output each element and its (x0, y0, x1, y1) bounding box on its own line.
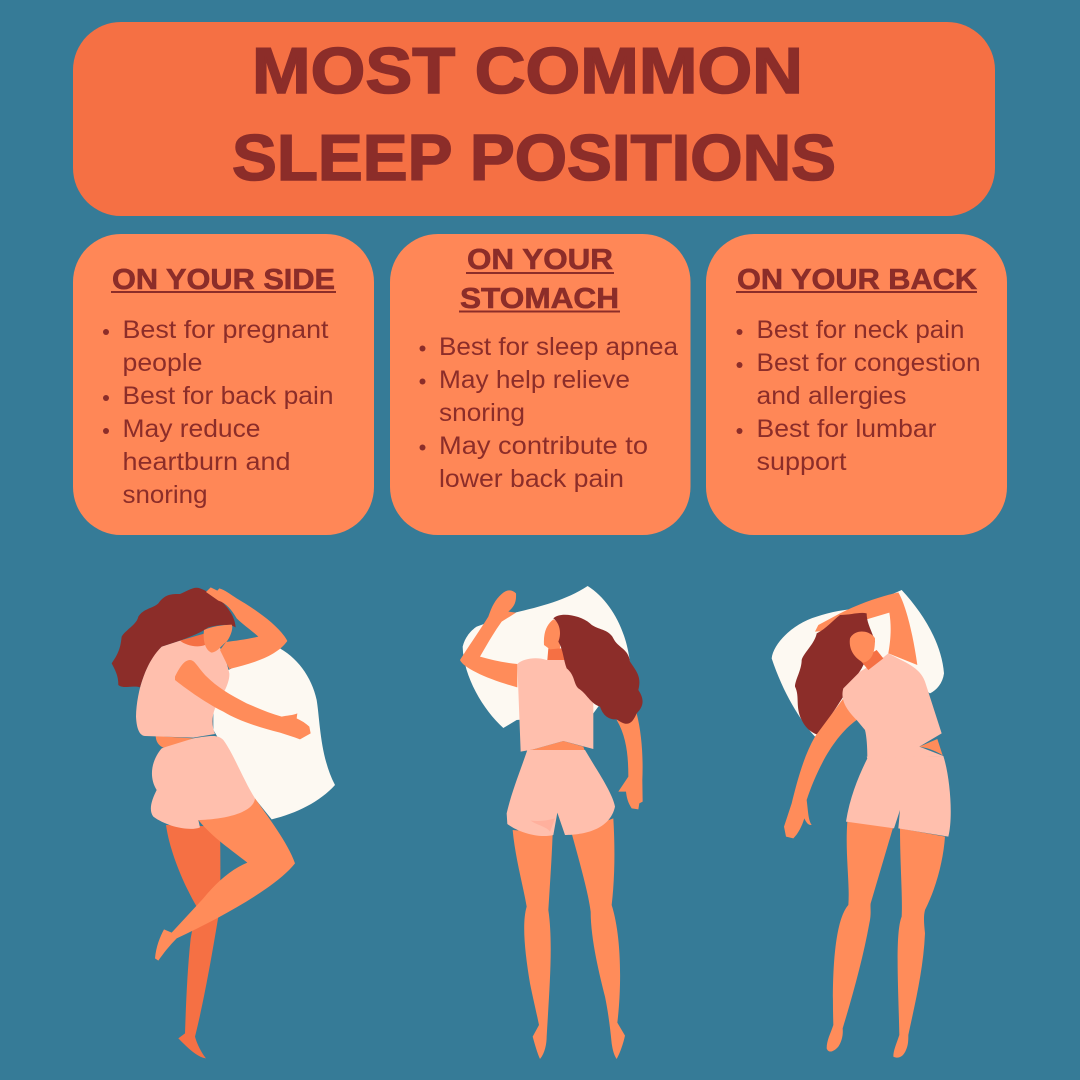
list: on your side benefits: heartburn and (122, 448, 290, 476)
list: on your stomach benefits: Best for sleep apnea (439, 333, 678, 361)
list: on your back benefits (736, 316, 980, 476)
illustration: woman sleeping on her stomach (460, 586, 643, 1059)
panel: on your back (706, 234, 1007, 535)
list: on your stomach benefits (420, 333, 678, 493)
list: on your stomach benefits: May help relieve (439, 366, 630, 394)
list: on your back benefits: support (756, 448, 847, 476)
list: on your side benefits: May reduce (122, 415, 260, 443)
list: on your stomach benefits: snoring (439, 399, 525, 427)
list: on your side benefits (103, 316, 334, 509)
heading: on your side: ON YOUR SIDE (112, 264, 335, 296)
illustration: woman sleeping on her side (112, 587, 335, 1058)
heading: on your back: ON YOUR BACK (737, 264, 977, 296)
illustration: woman sleeping on her back (772, 590, 951, 1058)
title (232, 34, 836, 194)
panel: on your side (73, 234, 374, 535)
list: on your back benefits: Best for congestion (756, 349, 980, 377)
heading: on your stomach: ON YOUR (467, 244, 613, 276)
list: on your back benefits: Best for lumbar (756, 415, 936, 443)
list: on your back benefits: Best for neck pain (756, 316, 964, 344)
list: on your side benefits: snoring (122, 481, 208, 509)
list: on your back benefits: and allergies (756, 382, 906, 410)
list: on your side benefits: Best for pregnant (122, 316, 329, 344)
list: on your stomach benefits: lower back pain (439, 465, 624, 493)
title: MOST COMMON (252, 34, 803, 107)
title: SLEEP POSITIONS (232, 121, 836, 194)
list: on your side benefits: people (122, 349, 202, 377)
list: on your stomach benefits: May contribute to (439, 432, 648, 460)
list: on your side benefits: Best for back pain (122, 382, 334, 410)
heading: on your stomach (459, 244, 620, 315)
panel: on your stomach (390, 234, 690, 535)
panel: title banner (73, 22, 995, 216)
heading: on your stomach: STOMACH (460, 283, 619, 315)
